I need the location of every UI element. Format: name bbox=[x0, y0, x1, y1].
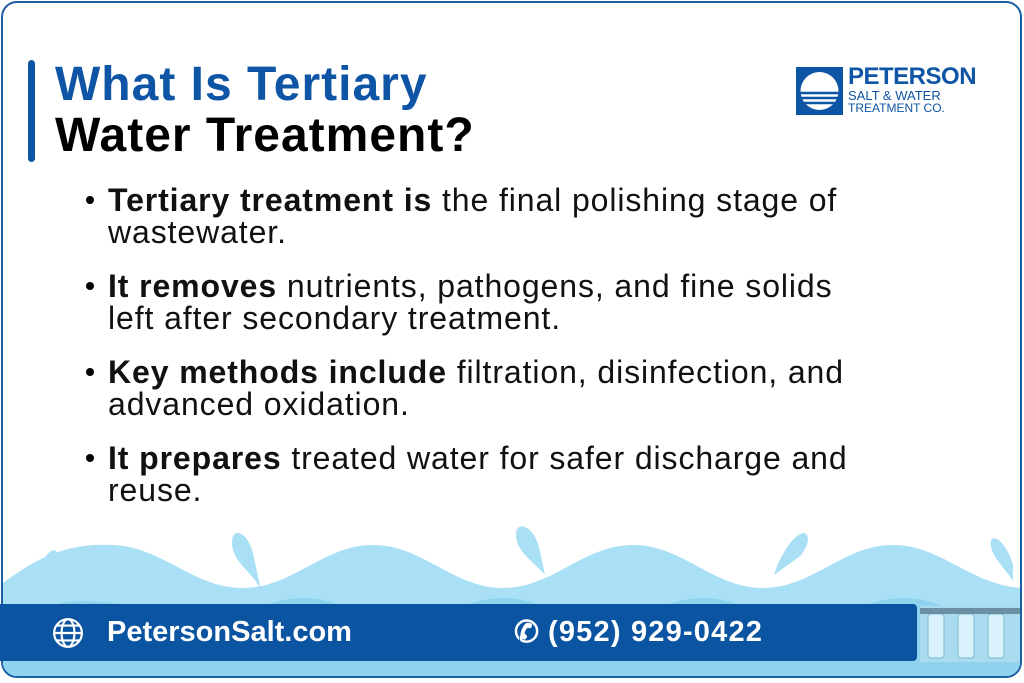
bullet 1: wastewater. bbox=[108, 214, 287, 250]
logo: SALT & WATER bbox=[848, 88, 941, 103]
title: Water Treatment? bbox=[55, 109, 475, 162]
bullet 4: reuse. bbox=[108, 472, 202, 508]
bullet 4: It prepares treated water for safer discharge and bbox=[108, 440, 848, 476]
logo: TREATMENT CO. bbox=[848, 101, 945, 115]
bullet 3: advanced oxidation. bbox=[108, 386, 410, 422]
bullet 4 bbox=[86, 442, 1006, 506]
filters image bbox=[920, 606, 1020, 662]
bullet list bbox=[86, 182, 848, 508]
logo: PETERSON bbox=[848, 63, 976, 90]
bullet 3: Key methods include filtration, disinfection, and bbox=[108, 354, 844, 390]
bullet 1 bbox=[86, 184, 1006, 248]
bullet 2: It removes nutrients, pathogens, and fine solids bbox=[108, 268, 833, 304]
accent bar bbox=[28, 60, 35, 162]
logo bbox=[796, 63, 976, 115]
footer bar bbox=[0, 604, 917, 661]
waves bbox=[3, 526, 1020, 676]
icon: logo mark bbox=[796, 67, 843, 115]
title bbox=[55, 58, 475, 162]
phone number: (952) 929-0422 bbox=[548, 616, 763, 648]
title: What Is Tertiary bbox=[55, 58, 428, 111]
bullet 2: left after secondary treatment. bbox=[108, 300, 561, 336]
icon: globe bbox=[53, 618, 83, 648]
bullet 2 bbox=[86, 270, 1006, 334]
icon: phone: ✆ bbox=[514, 616, 539, 649]
bullet 1: Tertiary treatment is the final polishing stage of bbox=[108, 182, 837, 218]
website: PetersonSalt.com bbox=[107, 616, 352, 648]
bullet 3 bbox=[86, 356, 1006, 420]
